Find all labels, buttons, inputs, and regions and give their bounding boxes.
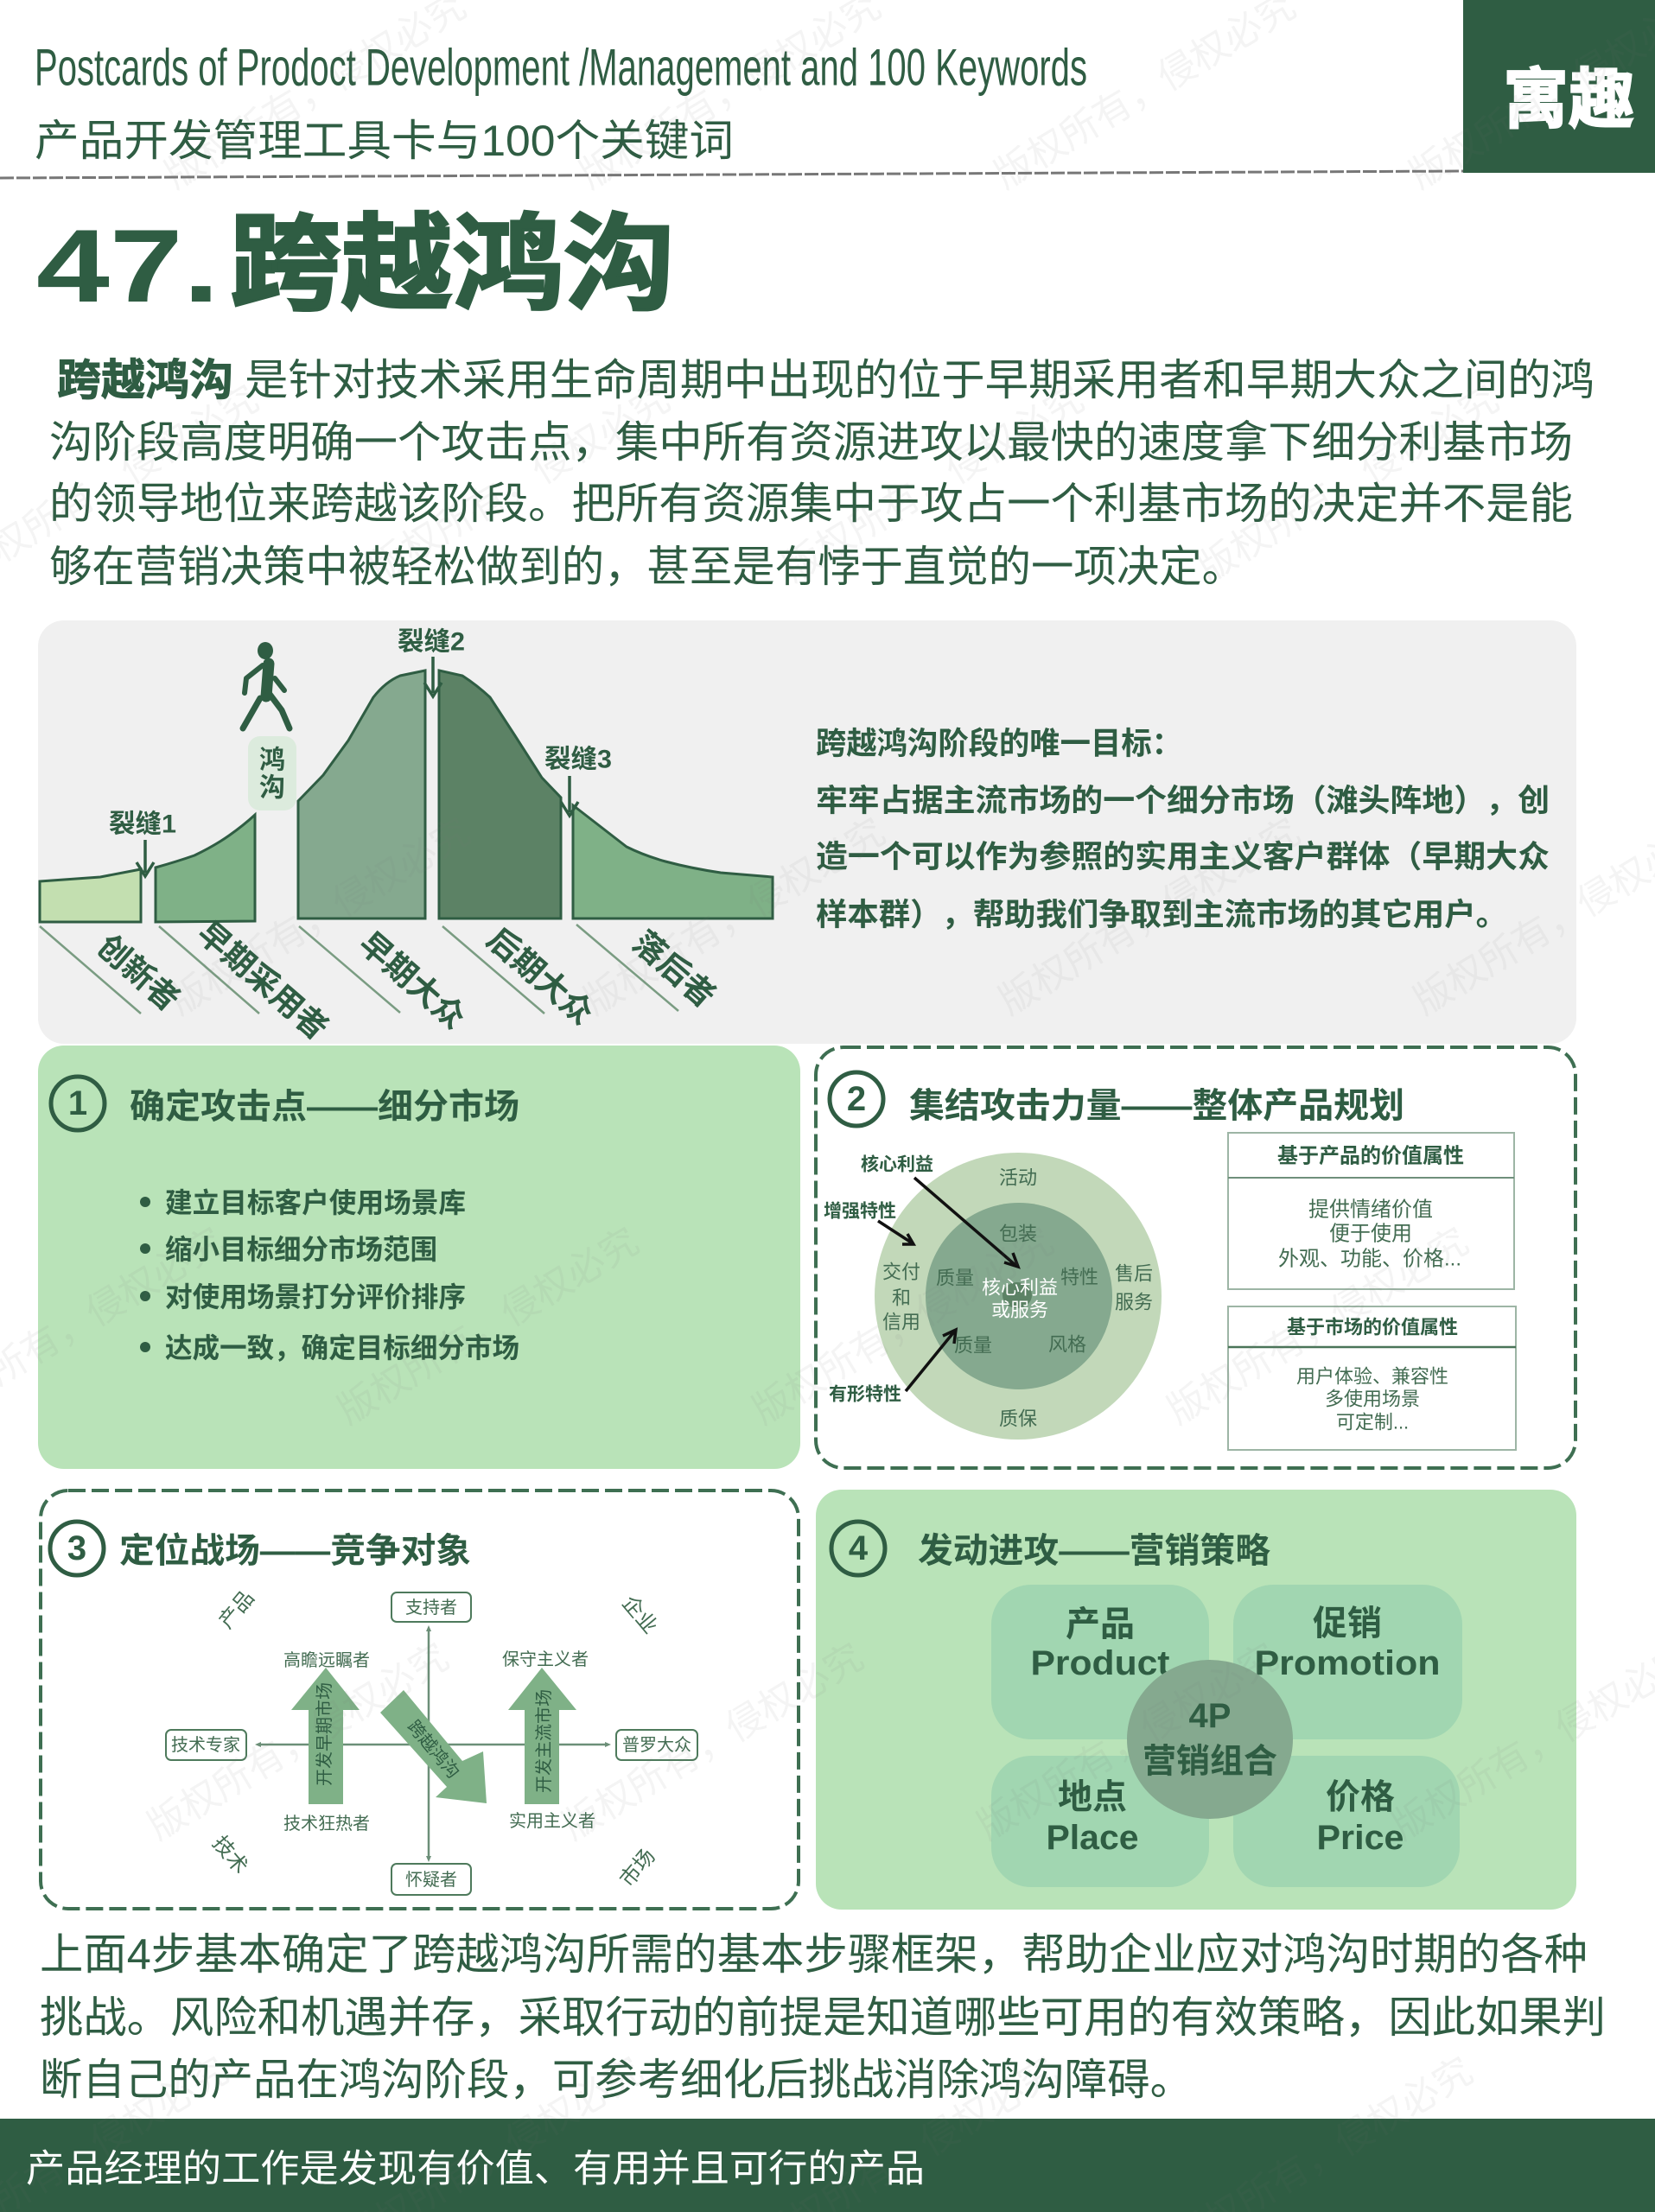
bullet list: 缩小目标细分市场范围 xyxy=(165,1234,437,1265)
english series title: Postcards of Prodoct Development /Management and 100 Keywords xyxy=(35,38,1087,97)
whole product rings: 和 xyxy=(892,1287,911,1308)
goal text: 样本群），帮助我们争取到主流市场的其它用户。 xyxy=(816,897,1507,931)
4P blocks: Product xyxy=(1030,1644,1170,1682)
adopter labels: 实用主义者 xyxy=(509,1811,595,1831)
logo block xyxy=(1463,0,1655,173)
whole product rings: 活动 xyxy=(999,1166,1037,1189)
icon: walking person xyxy=(243,642,290,728)
axis boxes: 普罗大众 xyxy=(622,1735,691,1755)
table: market value attributes: 可定制... xyxy=(1336,1412,1409,1433)
corner labels: 产品 xyxy=(214,1586,259,1633)
heading 1: 确定攻击点——细分市场 xyxy=(130,1088,519,1126)
title: 47. xyxy=(36,208,220,324)
4P centre: 4P xyxy=(1189,1697,1231,1735)
table: product value attributes: 基于产品的价值属性 xyxy=(1277,1144,1464,1168)
whole product rings: 售后 xyxy=(1115,1263,1153,1284)
closing paragraph: 断自己的产品在鸿沟阶段，可参考细化后挑战消除鸿沟障碍。 xyxy=(40,2056,1193,2104)
ring callouts: 核心利益 xyxy=(861,1154,933,1175)
goal text xyxy=(816,726,1550,931)
whole product rings: 质保 xyxy=(999,1408,1037,1429)
curve segment: early adopters xyxy=(156,815,255,922)
heading 2: 集结攻击力量——整体产品规划 xyxy=(909,1087,1404,1125)
ring callouts xyxy=(824,1154,1018,1405)
corner labels: 技术 xyxy=(207,1832,252,1878)
intro paragraph xyxy=(49,356,1595,591)
bullet list: 达成一致，确定目标细分市场 xyxy=(165,1332,519,1363)
step number 1 xyxy=(51,1077,105,1130)
title xyxy=(36,206,675,324)
axis boxes: 怀疑者 xyxy=(405,1870,457,1890)
whole product rings: 核心利益 xyxy=(982,1277,1058,1298)
chasm tag xyxy=(248,736,296,810)
whole product rings: 风格 xyxy=(1048,1334,1086,1355)
4P blocks: 产品 xyxy=(1066,1605,1135,1643)
whole product rings: 质量 xyxy=(954,1334,992,1357)
step number 2: 2 xyxy=(847,1080,866,1118)
watermarks: 版权所有，侵权必究 xyxy=(776,378,1091,590)
panel 2: whole product xyxy=(816,1047,1575,1468)
ring callouts: 有形特性 xyxy=(829,1384,901,1405)
whole product rings: 包装 xyxy=(999,1224,1037,1244)
segment labels xyxy=(40,915,722,1046)
table: product value attributes xyxy=(1228,1133,1514,1289)
4P blocks: Promotion xyxy=(1255,1644,1440,1682)
arrow: mainstream market: 开发主流市场 xyxy=(534,1689,554,1793)
4P blocks: 促销 xyxy=(1313,1605,1382,1643)
watermarks: 版权所有，侵权必究 xyxy=(331,1220,646,1433)
adopter labels: 保守主义者 xyxy=(502,1649,589,1669)
arrow: early market xyxy=(291,1668,360,1804)
crack label 3: 裂缝3 xyxy=(544,745,612,774)
watermarks: 版权所有，侵权必究 xyxy=(577,810,892,1023)
crack label 2: 裂缝2 xyxy=(398,627,465,657)
4P blocks xyxy=(991,1585,1462,1887)
segment labels: 创新者 xyxy=(91,928,186,1018)
arrow: cross the chasm: 跨越鸿沟 xyxy=(404,1717,463,1783)
footer bar: 产品经理的工作是发现有价值、有用并且可行的产品 xyxy=(26,2148,925,2190)
closing paragraph: 挑战。风险和机遇并存，采取行动的前提是知道哪些可用的有效策略，因此如果判 xyxy=(40,1993,1606,2042)
heading 4: 发动进攻——营销策略 xyxy=(918,1532,1270,1570)
intro paragraph: 沟阶段高度明确一个攻击点，集中所有资源进攻以最快的速度拿下细分利基市场 xyxy=(49,418,1573,467)
step number 2 xyxy=(830,1072,883,1126)
crack arrow 1 xyxy=(137,840,154,876)
whole product rings: 交付 xyxy=(882,1262,920,1282)
table: market value attributes: 基于市场的价值属性 xyxy=(1287,1317,1458,1338)
heading 3: 定位战场——竞争对象 xyxy=(119,1532,471,1570)
closing paragraph: 上面4步基本确定了跨越鸿沟所需的基本步骤框架，帮助企业应对鸿沟时期的各种 xyxy=(40,1930,1588,1979)
table: product value attributes: 便于使用 xyxy=(1329,1222,1412,1246)
axes xyxy=(255,1625,611,1862)
step number 3 xyxy=(50,1522,104,1575)
adopter labels: 技术狂热者 xyxy=(283,1814,370,1834)
closing paragraph xyxy=(40,1930,1606,2104)
bullet list: 建立目标客户使用场景库 xyxy=(165,1187,466,1218)
header xyxy=(0,0,1655,178)
panel 3: battlefield xyxy=(41,1491,799,1909)
corner labels xyxy=(207,1586,662,1891)
segment labels: 早期大众 xyxy=(353,925,472,1036)
arrow: cross the chasm xyxy=(380,1690,487,1803)
watermarks: 版权所有，侵权必究 xyxy=(1191,378,1505,590)
arrow: early market: 开发早期市场 xyxy=(315,1682,334,1786)
axis boxes: 支持者 xyxy=(405,1598,457,1618)
step number 3: 3 xyxy=(67,1529,86,1567)
segment labels: 早期采用者 xyxy=(191,915,334,1046)
panel 1: target segment xyxy=(38,1046,800,1469)
adopter labels: 高瞻远瞩者 xyxy=(283,1650,370,1670)
watermarks: 版权所有，侵权必究 xyxy=(162,810,477,1023)
intro paragraph: 够在营销决策中被轻松做到的，甚至是有悖于直觉的一项决定。 xyxy=(49,543,1244,591)
table: product value attributes: 外观、功能、价格... xyxy=(1278,1248,1461,1270)
whole product rings: 质量 xyxy=(936,1267,974,1289)
watermarks: 版权所有，侵权必究 xyxy=(556,1636,870,1848)
crack arrow 2 xyxy=(424,657,442,696)
4P blocks: Place xyxy=(1046,1819,1139,1857)
watermarks: 版权所有，侵权必究 xyxy=(746,1220,1060,1433)
crack label 1: 裂缝1 xyxy=(109,810,176,838)
watermarks: 版权所有，侵权必究 xyxy=(1161,1220,1475,1433)
table: market value attributes xyxy=(1228,1306,1516,1450)
watermarks: 版权所有，侵权必究 xyxy=(992,810,1307,1023)
crack arrow 3 xyxy=(561,776,578,816)
intro paragraph: 是针对技术采用生命周期中出现的位于早期采用者和早期大众之间的鸿 xyxy=(245,356,1595,404)
curve segment: early majority xyxy=(298,671,425,918)
4P centre: 营销组合 xyxy=(1143,1744,1277,1780)
intro paragraph: 的领导地位来跨越该阶段。把所有资源集中于攻占一个利基市场的决定并不是能 xyxy=(49,480,1573,528)
whole product rings: 或服务 xyxy=(991,1300,1048,1320)
axis boxes xyxy=(166,1592,697,1895)
whole product rings: 特性 xyxy=(1060,1267,1098,1287)
curve segment: innovators xyxy=(40,869,141,922)
segment labels: 后期大众 xyxy=(481,921,600,1032)
corner labels: 企业 xyxy=(617,1592,662,1638)
goal text: 牢牢占据主流市场的一个细分市场（滩头阵地），创 xyxy=(816,783,1550,817)
panel: chasm curve xyxy=(38,620,1576,1046)
bullet list xyxy=(140,1187,519,1363)
title: 跨越鸿沟 xyxy=(230,206,675,323)
chasm tag: 沟 xyxy=(259,774,285,802)
4P centre xyxy=(1127,1660,1293,1819)
ring callouts: 增强特性 xyxy=(824,1201,896,1222)
4P blocks: Price xyxy=(1317,1819,1404,1857)
4P blocks: 价格 xyxy=(1326,1778,1395,1816)
watermarks: 版权所有，侵权必究 xyxy=(971,1636,1285,1848)
goal text: 跨越鸿沟阶段的唯一目标： xyxy=(816,726,1182,760)
step number 1: 1 xyxy=(68,1084,87,1122)
step number 4 xyxy=(831,1522,885,1575)
goal text: 造一个可以作为参照的实用主义客户群体（早期大众 xyxy=(816,838,1550,874)
whole product rings: 服务 xyxy=(1115,1291,1153,1313)
whole product rings xyxy=(875,1153,1162,1440)
footer bar xyxy=(0,2119,1655,2212)
axis boxes: 技术专家 xyxy=(171,1735,240,1755)
chasm tag: 鸿 xyxy=(259,747,285,774)
segment labels: 落后者 xyxy=(627,925,722,1014)
step number 4: 4 xyxy=(849,1529,869,1567)
chinese series title: 产品开发管理工具卡与100个关键词 xyxy=(35,117,734,165)
whole product rings: 信用 xyxy=(882,1312,920,1332)
panel 4: marketing 4P xyxy=(816,1490,1576,1910)
watermarks: 版权所有，侵权必究 xyxy=(362,378,677,590)
watermarks: 版权所有，侵权必究 xyxy=(141,1636,455,1848)
curve segment: laggards xyxy=(573,805,773,918)
table: product value attributes: 提供情绪价值 xyxy=(1308,1198,1433,1222)
curve segment: late majority xyxy=(439,671,561,918)
adopter labels xyxy=(283,1649,595,1834)
logo block: 寓趣 xyxy=(1503,64,1634,137)
intro paragraph: 跨越鸿沟 xyxy=(57,356,233,404)
corner labels: 市场 xyxy=(615,1845,660,1891)
bullet list: 对使用场景打分评价排序 xyxy=(165,1281,466,1313)
table: market value attributes: 多使用场景 xyxy=(1325,1388,1420,1410)
table: market value attributes: 用户体验、兼容性 xyxy=(1296,1365,1448,1388)
4P blocks: 地点 xyxy=(1058,1778,1127,1816)
arrow: mainstream market xyxy=(508,1668,576,1804)
